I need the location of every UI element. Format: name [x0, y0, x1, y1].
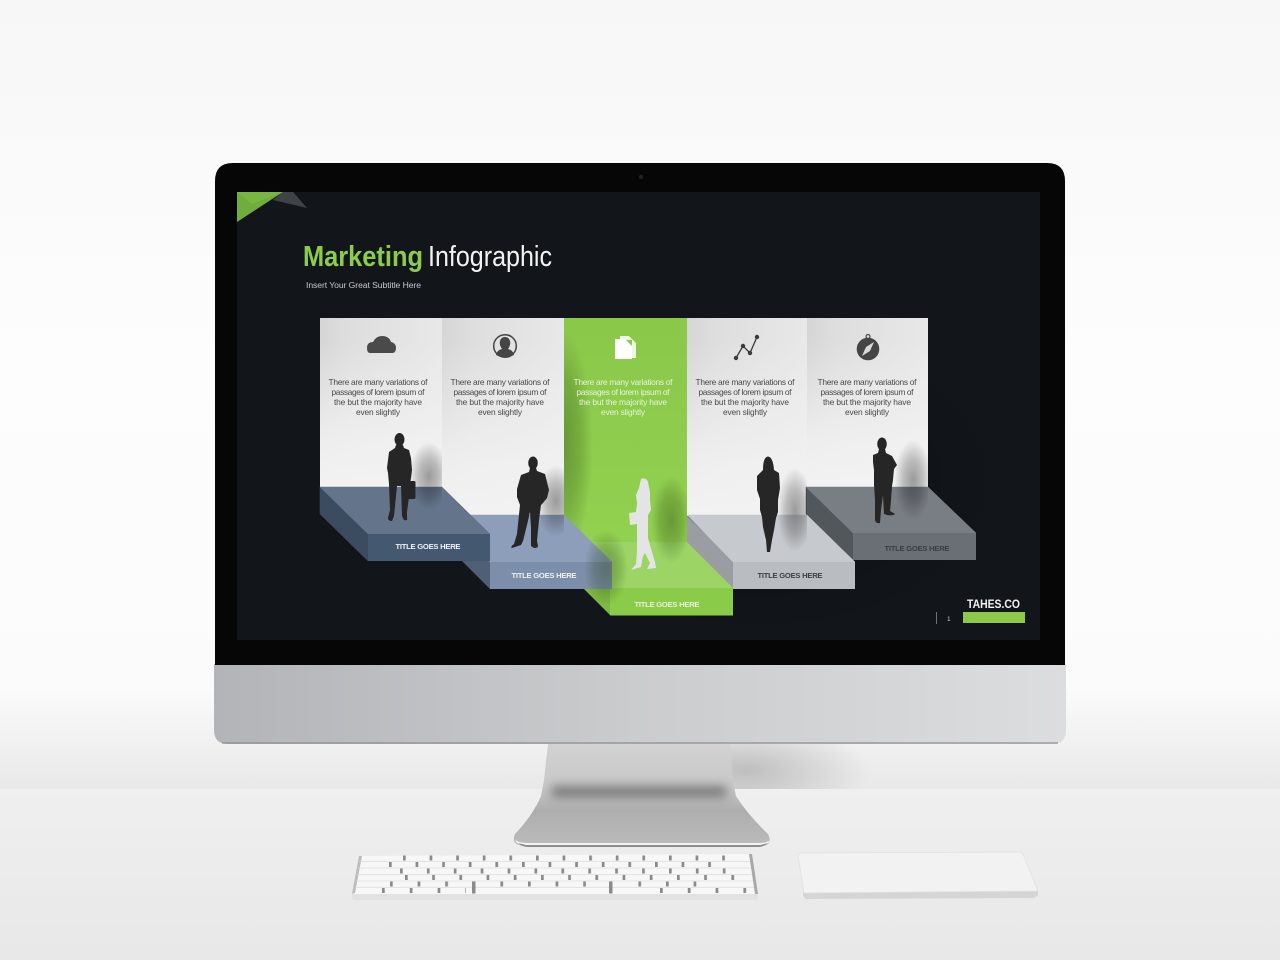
- title: Marketing: Marketing: [303, 241, 423, 273]
- body text 2: There are many variations of: [450, 377, 550, 387]
- body text 5: passages of lorem ipsum of: [820, 387, 914, 397]
- step 5: dark grey platform: [806, 487, 976, 560]
- body text 3: [574, 377, 673, 417]
- wall 1 lower tint: [320, 340, 442, 488]
- key row lines: [355, 862, 754, 888]
- icon: compass: [857, 334, 879, 360]
- body text 5: even slightly: [845, 407, 890, 417]
- monitor chin: [214, 664, 1066, 744]
- body text 3: even slightly: [601, 407, 646, 417]
- body text 1: There are many variations of: [328, 377, 428, 387]
- body text 5: [818, 377, 917, 417]
- body text 4: [696, 377, 795, 417]
- step 2 label: TITLE GOES HERE: [512, 571, 576, 580]
- body text 1: the but the majority have: [334, 397, 422, 407]
- body text 4: the but the majority have: [701, 397, 789, 407]
- body text 2: passages of lorem ipsum of: [454, 387, 547, 397]
- body text 4: passages of lorem ipsum of: [698, 387, 792, 397]
- green platform side: [584, 589, 612, 615]
- figure 1: man with briefcase: [387, 433, 416, 521]
- panel: column 3 highlighted: [564, 318, 733, 616]
- green platform top: [564, 542, 733, 588]
- figure 5: man arms crossed: [873, 438, 897, 523]
- brand name: TAHES.CO: [967, 599, 1020, 611]
- footer brand: [936, 599, 1025, 624]
- slide corner decoration: [237, 192, 307, 222]
- body text 4: There are many variations of: [696, 377, 795, 387]
- title: [303, 241, 552, 273]
- trackpad: [798, 852, 1038, 899]
- body text 2: the but the majority have: [456, 397, 544, 407]
- monitor shadow on wall: [620, 720, 870, 820]
- camera: [639, 175, 643, 179]
- chin lower edge: [222, 742, 1058, 744]
- diagram shadow: [500, 315, 1020, 645]
- step 4: light grey platform: [686, 515, 855, 589]
- body text 5: There are many variations of: [818, 377, 917, 387]
- monitor bezel: [215, 163, 1065, 665]
- body text 4: even slightly: [723, 407, 768, 417]
- desk surface: [0, 789, 1280, 960]
- panel: column 5: [807, 318, 928, 488]
- body text 1: [328, 377, 428, 417]
- body text 3: There are many variations of: [574, 377, 673, 387]
- body text 2: even slightly: [478, 407, 523, 417]
- page number: 1: [947, 616, 951, 623]
- step 1 label: TITLE GOES HERE: [396, 542, 460, 551]
- step 2: blue platform: [442, 515, 612, 589]
- wall 2 lower tint: [442, 340, 564, 516]
- icon: cloud: [367, 336, 396, 353]
- icon: documents: [615, 336, 636, 359]
- monitor stand: [514, 744, 770, 847]
- wall 4 lower tint: [687, 340, 807, 516]
- key gaps: [381, 856, 749, 894]
- icon: user circle: [494, 335, 516, 357]
- screen: [237, 192, 1040, 640]
- body text 5: the but the majority have: [823, 397, 911, 407]
- wall 1: [320, 318, 442, 488]
- step 4 label: TITLE GOES HERE: [758, 571, 822, 580]
- green platform front: [610, 588, 733, 616]
- body text 3: the but the majority have: [579, 397, 667, 407]
- title: Infographic: Infographic: [428, 241, 552, 273]
- panel: column 4: [687, 318, 807, 516]
- page number divider: [936, 612, 937, 624]
- green wall: [564, 318, 687, 543]
- figure 4: woman standing: [757, 456, 780, 552]
- brand bar: [963, 612, 1025, 623]
- wall 5: [807, 318, 928, 488]
- body text 2: [450, 377, 550, 417]
- figure 3: white woman walking: [629, 478, 656, 570]
- wall 2: [442, 318, 564, 516]
- icon: line chart: [734, 335, 759, 360]
- green wall left shadow: [564, 344, 590, 528]
- wall 4: [687, 318, 807, 516]
- body text 1: even slightly: [356, 407, 401, 417]
- wall 5 lower tint: [807, 340, 928, 488]
- body text 1: passages of lorem ipsum of: [332, 387, 425, 397]
- monitor: [214, 163, 1066, 744]
- keyboard: [352, 854, 758, 900]
- step 1: slate platform: [320, 487, 490, 561]
- step 3 label: TITLE GOES HERE: [634, 600, 700, 609]
- panel: column 1: [320, 318, 442, 488]
- subtitle: Insert Your Great Subtitle Here: [306, 280, 421, 290]
- step 5 label: TITLE GOES HERE: [884, 544, 950, 553]
- panel: column 2: [442, 318, 564, 516]
- body text 3: passages of lorem ipsum of: [576, 387, 670, 397]
- figure 2: man hands in pockets: [511, 456, 549, 548]
- figure shadows: [409, 440, 932, 606]
